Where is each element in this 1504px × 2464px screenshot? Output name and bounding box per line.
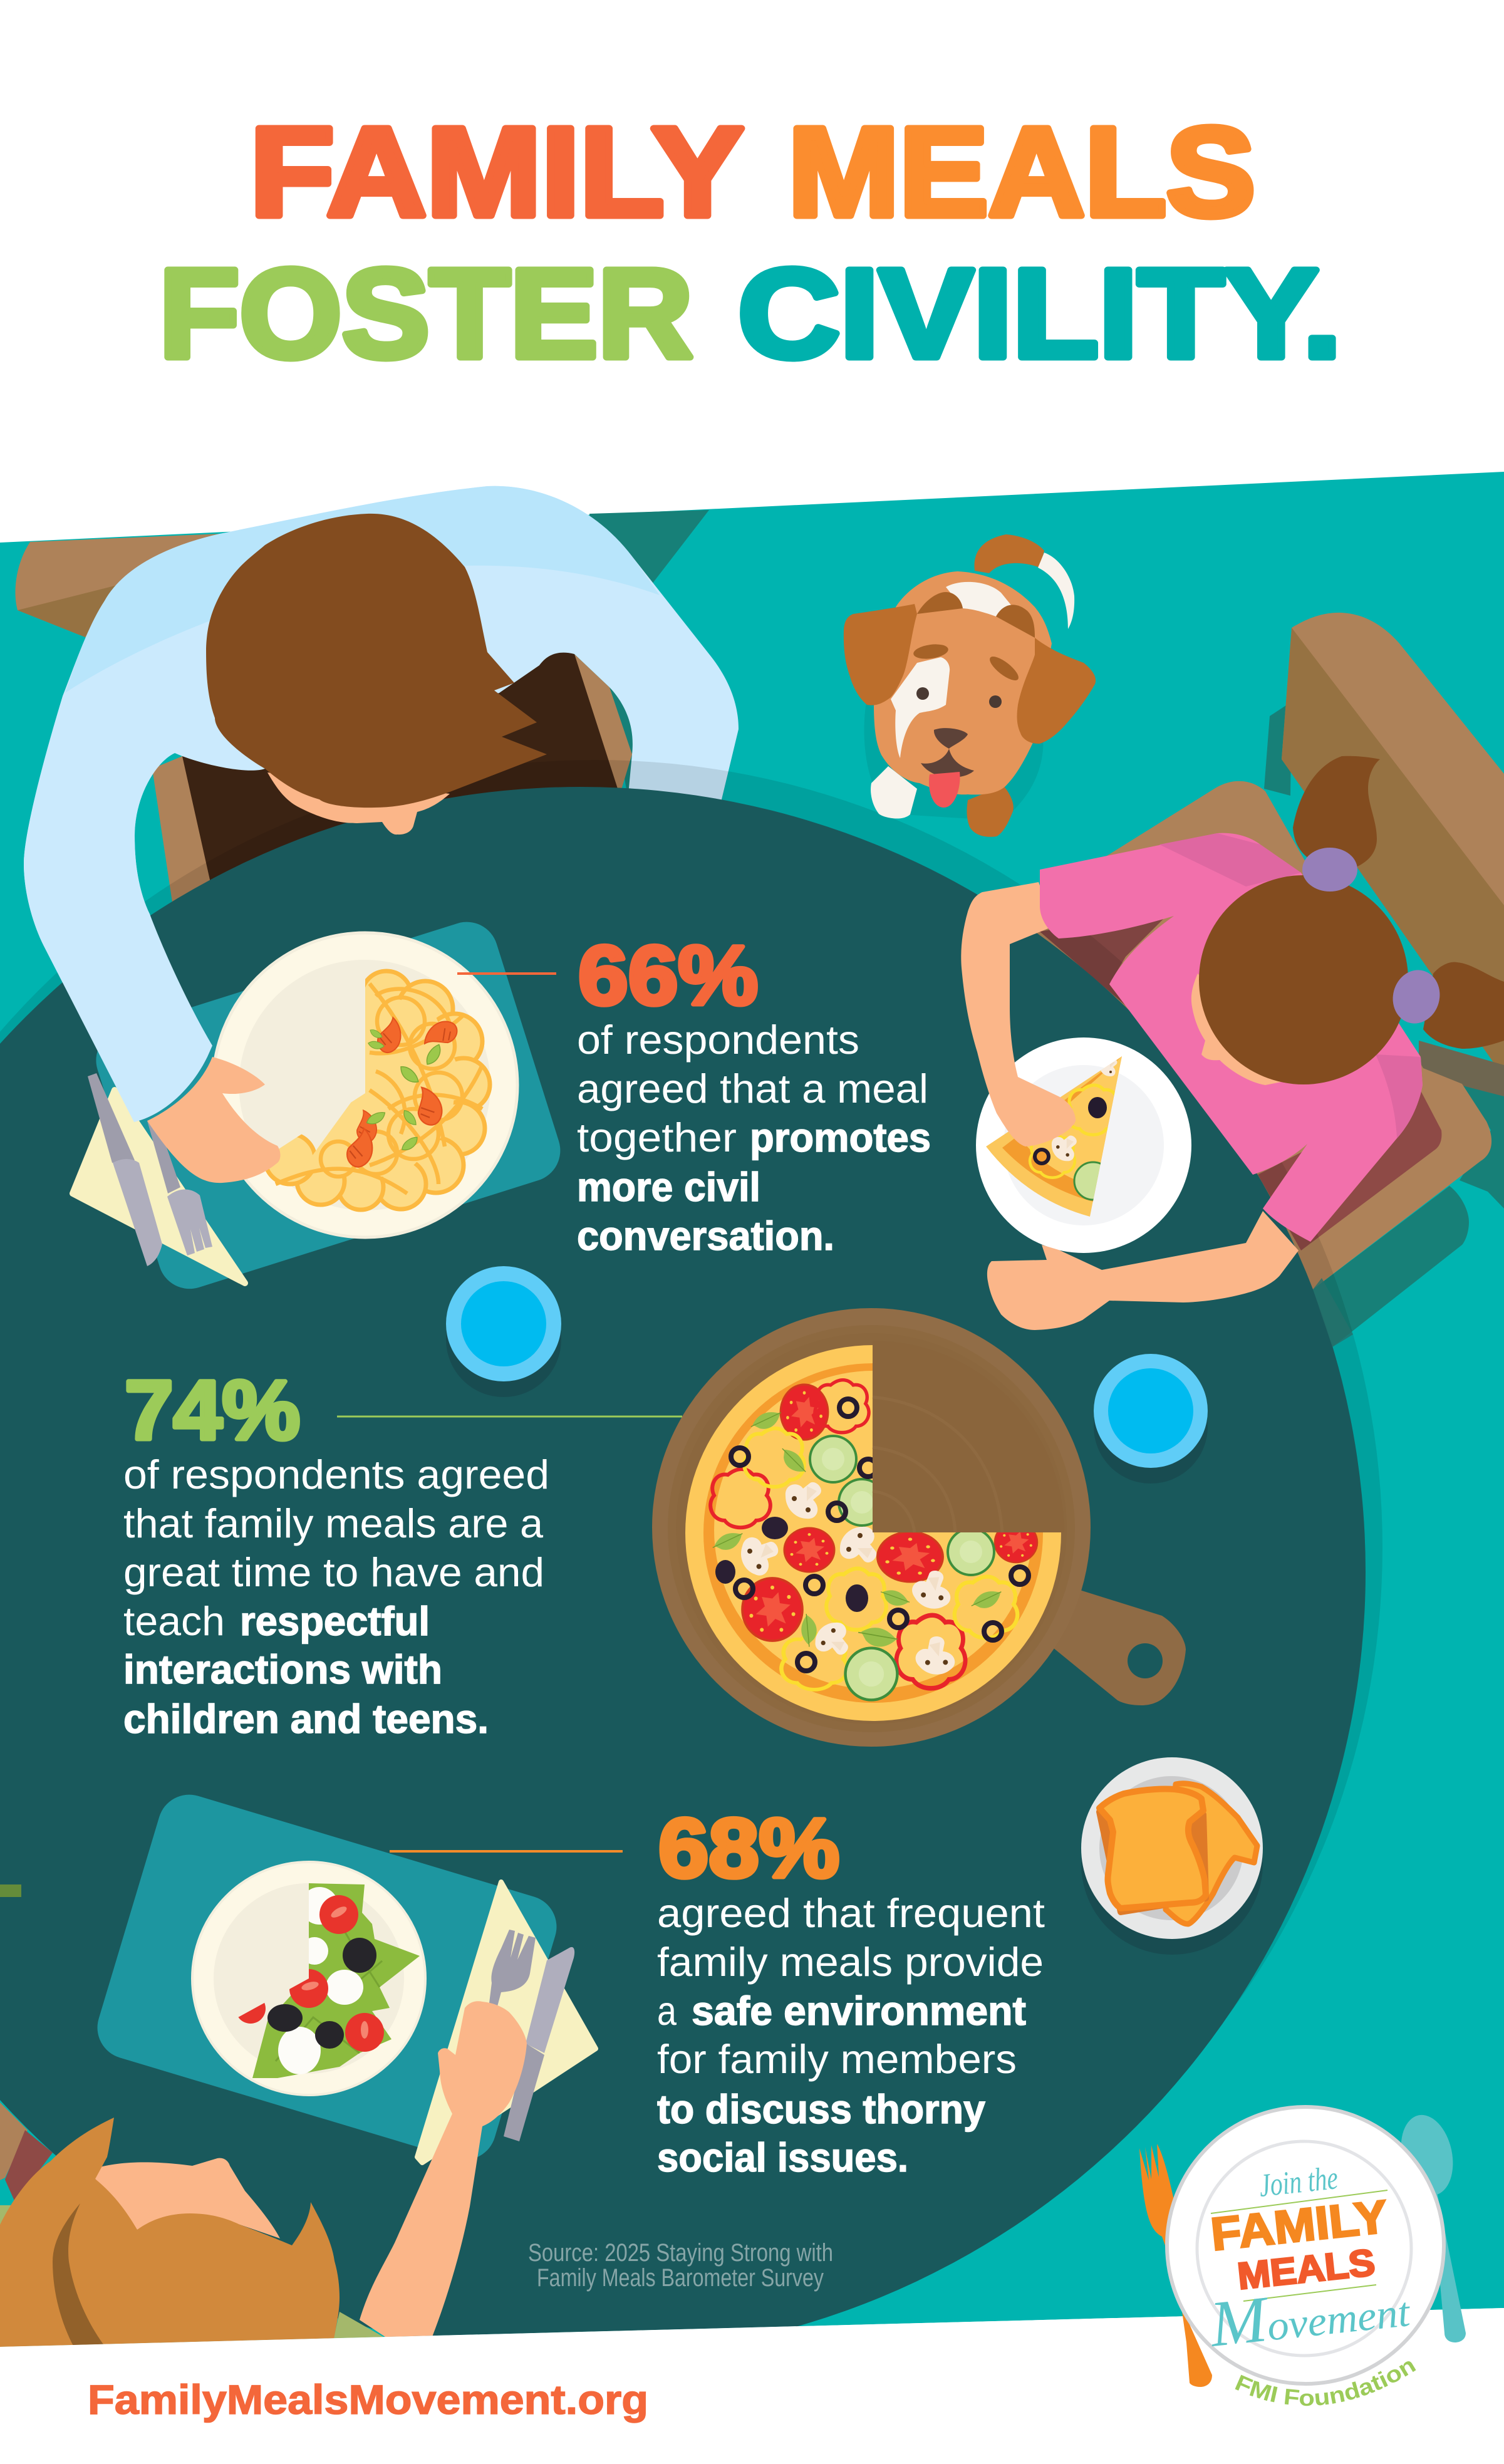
- man face: [267, 772, 450, 834]
- title: [159, 101, 1342, 384]
- description: respectful: [240, 1598, 430, 1644]
- man sweater: [24, 486, 739, 1122]
- logo spoon: [1394, 2110, 1466, 2342]
- face: [1191, 974, 1303, 1085]
- round dinner table: [0, 787, 1366, 2357]
- child shirt: [334, 2312, 383, 2338]
- front toast: [1099, 1789, 1206, 1908]
- description: [657, 1890, 1045, 2180]
- upper bun: [1293, 756, 1380, 867]
- description: more civil: [577, 1164, 760, 1210]
- description: social issues.: [657, 2134, 908, 2180]
- man chair and shadow: [15, 510, 739, 927]
- description: safe environment: [692, 1988, 1026, 2034]
- knife and fork one: [88, 1073, 212, 1266]
- peppers: [710, 1380, 1017, 1690]
- number: 66%: [578, 929, 758, 1022]
- dog: [844, 534, 1096, 837]
- dog face details: [916, 687, 1002, 808]
- basil leaves: [713, 1412, 1001, 1655]
- source note: [528, 2239, 833, 2292]
- crust and cheese: [685, 1345, 1061, 1721]
- logo fork: [1139, 2144, 1212, 2387]
- number: 68%: [658, 1802, 839, 1895]
- dog tail: [974, 534, 1074, 629]
- dog ears: [844, 604, 1096, 744]
- girl arm reaching to slice: [961, 882, 1076, 1146]
- teal background band: [0, 472, 1504, 2347]
- table shadow ring: [0, 760, 1382, 2016]
- title: MEALS: [788, 101, 1255, 242]
- source note: Source: 2025 Staying Strong with: [528, 2239, 833, 2267]
- stat: 66 percent: [457, 929, 931, 1259]
- logo rule lines: [1211, 2190, 1387, 2301]
- plate: [192, 1862, 425, 2095]
- fork and knife three: [489, 1930, 574, 2141]
- logo meals: MEALS: [1235, 2241, 1377, 2297]
- description: [123, 1452, 549, 1742]
- logo plate: [1167, 2107, 1444, 2384]
- girl pink shirt: [1040, 833, 1423, 1242]
- man hair: [206, 514, 547, 808]
- website url: FamilyMealsMovement.org: [88, 2376, 648, 2423]
- olives: [715, 1399, 1029, 1671]
- title: CIVILITY.: [738, 242, 1342, 384]
- description: to discuss thorny: [657, 2086, 985, 2132]
- description: together: [577, 1115, 737, 1160]
- back toast: [1166, 1784, 1257, 1924]
- front toast shade: [1099, 1812, 1206, 1912]
- dog paws: [871, 766, 1014, 837]
- stat: 68 percent: [390, 1802, 1045, 2180]
- description: great time to have and: [123, 1549, 544, 1595]
- dog shadow: [864, 695, 1044, 821]
- head hair: [1199, 875, 1408, 1084]
- drinking glass two: [1094, 1354, 1208, 1484]
- description: conversation.: [577, 1213, 834, 1259]
- child arm and hand: [360, 2001, 527, 2343]
- description: promotes: [750, 1115, 931, 1160]
- description: children and teens.: [123, 1696, 489, 1742]
- logo family: FAMILY: [1208, 2190, 1390, 2260]
- description: agreed that frequent: [657, 1890, 1045, 1936]
- description: for family members: [657, 2036, 1017, 2082]
- title: FAMILY: [250, 101, 744, 242]
- shrimp and herbs: [338, 1016, 460, 1170]
- lower bun: [1423, 962, 1504, 1049]
- description: [577, 1017, 931, 1259]
- small green fragment at left edge: [0, 1884, 21, 1897]
- pasta plate: [213, 933, 517, 1237]
- girl plate with pizza slice: [976, 1037, 1191, 1253]
- bread plate: [1081, 1757, 1263, 1955]
- chair and seated child at bottom left: [0, 2001, 527, 2349]
- logo movement: Movement: [1205, 2268, 1413, 2361]
- child hair: [0, 2118, 340, 2349]
- child forehead: [95, 2158, 280, 2238]
- description: of respondents agreed: [123, 1452, 549, 1497]
- leader line: [390, 1850, 623, 1853]
- pizza slice: [986, 1056, 1122, 1217]
- pizza: [685, 1341, 1064, 1721]
- seat shadow over table: [1313, 1278, 1353, 1347]
- placemat three: [90, 1787, 564, 2168]
- cucumbers: [810, 1436, 994, 1700]
- leader line: [457, 972, 556, 975]
- source note: Family Meals Barometer Survey: [537, 2264, 824, 2292]
- description: of respondents: [577, 1017, 859, 1063]
- placemat one: [88, 914, 568, 1297]
- empty pie wedge: [214, 1883, 309, 2024]
- description: agreed that a meal: [577, 1066, 928, 1111]
- stat: 74 percent: [123, 1364, 682, 1742]
- drinking glass one: [446, 1266, 561, 1397]
- leader line: [337, 1416, 682, 1417]
- girl hair buns and face: [1191, 756, 1504, 1085]
- description: teach: [123, 1598, 225, 1644]
- board handle hole: [1128, 1643, 1163, 1678]
- white footer wedge: [0, 2308, 1504, 2464]
- logo join the: Join the: [1257, 2160, 1340, 2204]
- mushrooms: [735, 1482, 961, 1683]
- salad plate: [192, 1862, 425, 2095]
- napkin three: [417, 1882, 596, 2163]
- chair seat: [0, 2103, 53, 2230]
- tomatoes: [742, 1385, 1037, 1641]
- girl chair: [1027, 613, 1504, 1347]
- salad leaves: [252, 1883, 420, 2078]
- description: that family meals are a: [123, 1500, 544, 1546]
- missing quarter of pizza: [873, 1341, 1064, 1532]
- child hair shadow: [53, 2203, 107, 2349]
- pasta: [265, 971, 490, 1210]
- number: 74%: [125, 1364, 300, 1457]
- dog head: [874, 571, 1052, 794]
- plate: [213, 933, 517, 1237]
- pizza board: [652, 1308, 1186, 1747]
- man left arm: [24, 693, 212, 1122]
- dog dark patches: [913, 592, 1035, 684]
- description: a: [657, 1988, 677, 2034]
- description: family meals provide: [657, 1939, 1044, 1985]
- girl arm and hand on table: [987, 1211, 1299, 1330]
- logo: join the family meals movement: [1139, 2105, 1466, 2406]
- logo fmi foundation: FMI Foundation: [1235, 2361, 1416, 2406]
- empty pie wedge: [239, 960, 365, 1159]
- man hand: [147, 1057, 281, 1183]
- dog white patches: [891, 582, 1015, 758]
- description: interactions with: [123, 1646, 442, 1692]
- hair ties: [1302, 848, 1446, 1029]
- salad toppings: [236, 1887, 384, 2074]
- title: FOSTER: [159, 242, 693, 384]
- napkin one: [73, 1090, 245, 1283]
